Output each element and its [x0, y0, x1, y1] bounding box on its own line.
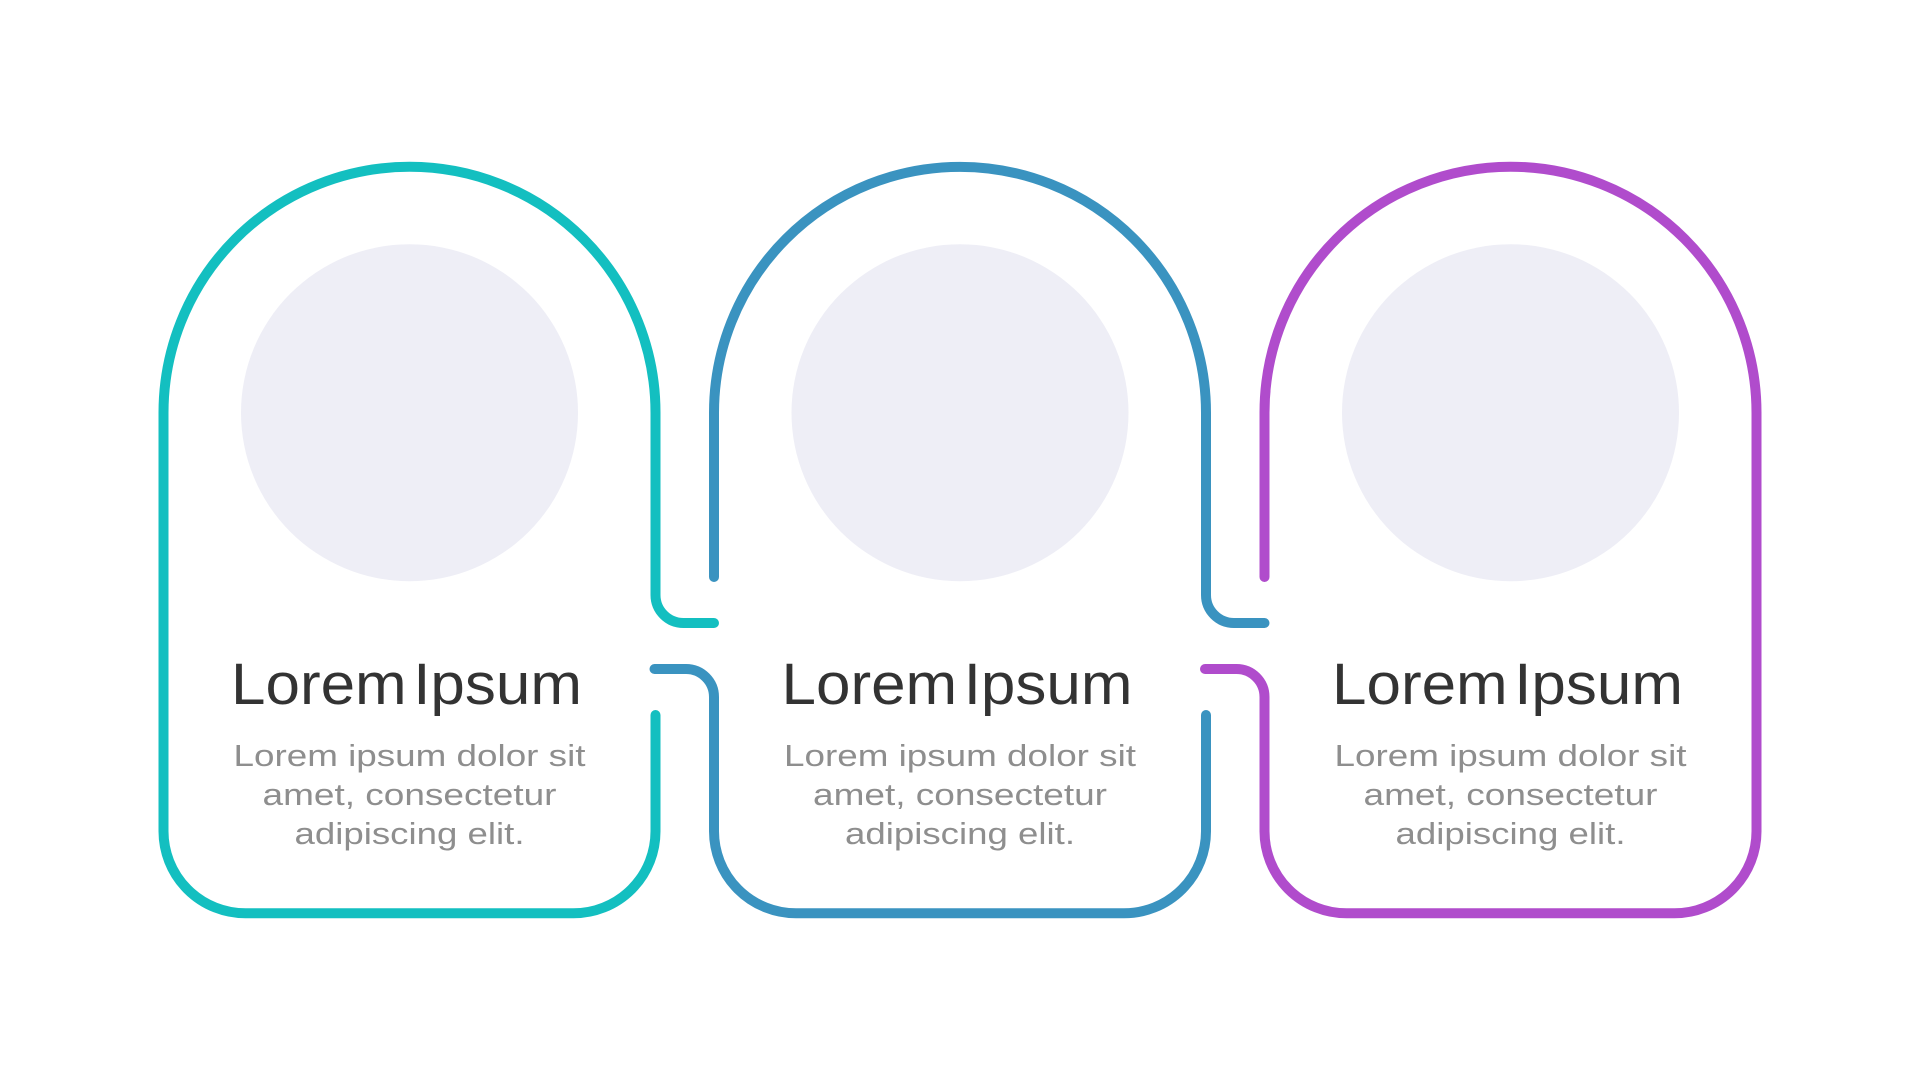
card 2 body text: adipiscing elit. — [845, 817, 1075, 851]
card 1 body text: Lorem ipsum dolor sit — [234, 739, 586, 773]
card 3 body text: adipiscing elit. — [1396, 817, 1626, 851]
card 3 body text: Lorem ipsum dolor sit — [1334, 739, 1687, 773]
card 2 placeholder circle — [792, 244, 1128, 581]
card 1 placeholder circle — [241, 244, 578, 581]
card 3 body text: amet, consectetur — [1364, 778, 1658, 812]
card 1 teal outline — [163, 167, 714, 913]
card 1 heading: Lorem Ipsum — [231, 652, 582, 717]
card 3 purple outline — [1205, 167, 1757, 913]
card 2 blue outline — [654, 167, 1264, 913]
panel: card 3 — [1205, 167, 1757, 913]
card 3 body text — [1334, 739, 1687, 851]
card 2 heading: Lorem Ipsum — [782, 652, 1132, 717]
card 2 body text: Lorem ipsum dolor sit — [784, 739, 1137, 773]
card 1 body text: adipiscing elit. — [294, 817, 524, 851]
card 3 heading: Lorem Ipsum — [1332, 652, 1683, 717]
card 1 body text — [234, 739, 586, 851]
panel: card 2 — [654, 167, 1264, 913]
card 2 body text: amet, consectetur — [813, 778, 1107, 812]
card 1 body text: amet, consectetur — [262, 778, 556, 812]
card 3 placeholder circle — [1342, 244, 1679, 581]
card 2 body text — [784, 739, 1137, 851]
panel: card 1 — [163, 167, 714, 913]
